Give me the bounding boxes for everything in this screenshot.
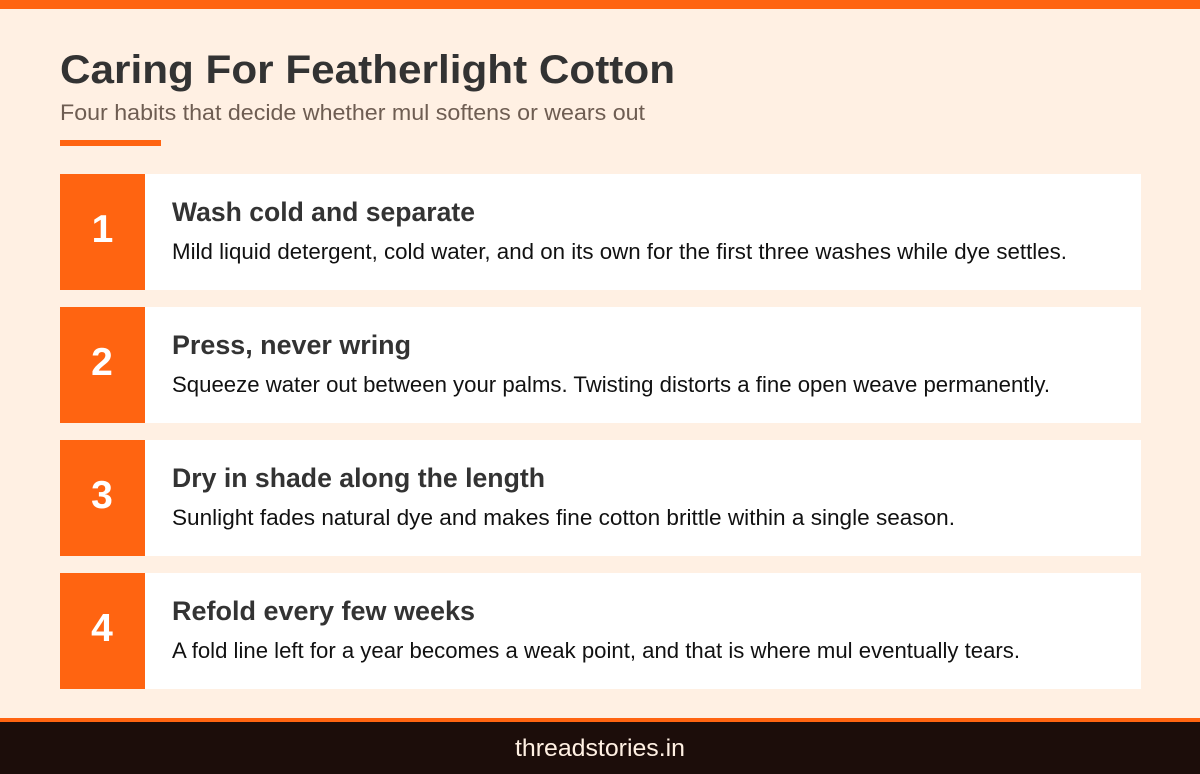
step 2 description: Squeeze water out between your palms. Twisting distorts a fine open weave permanently. [172, 372, 1050, 397]
footer website: threadstories.in [515, 735, 685, 762]
step 3 description: Sunlight fades natural dye and makes fine cotton brittle within a single season. [172, 505, 955, 530]
step 4 heading: Refold every few weeks [172, 596, 475, 626]
step 2 heading: Press, never wring [172, 330, 411, 360]
step 1 heading: Wash cold and separate [172, 197, 475, 227]
subtitle: Four habits that decide whether mul softens or wears out [60, 100, 645, 125]
title: Caring For Featherlight Cotton [60, 48, 675, 92]
step 3 heading: Dry in shade along the length [172, 463, 545, 493]
footer [0, 718, 1200, 774]
step 1 description: Mild liquid detergent, cold water, and on its own for the first three washes while dye settles. [172, 239, 1067, 264]
step 2 number: 2 [91, 341, 113, 384]
panel: step 4 [60, 573, 1141, 689]
panel: step 3 [60, 440, 1141, 556]
panel: step 2 [60, 307, 1141, 423]
step 3 number: 3 [91, 474, 113, 517]
panel: step 1 [60, 174, 1141, 290]
step 1 number: 1 [92, 208, 113, 251]
step 4 number: 4 [91, 607, 113, 650]
step 4 description: A fold line left for a year becomes a weak point, and that is where mul eventually tears. [172, 638, 1020, 663]
